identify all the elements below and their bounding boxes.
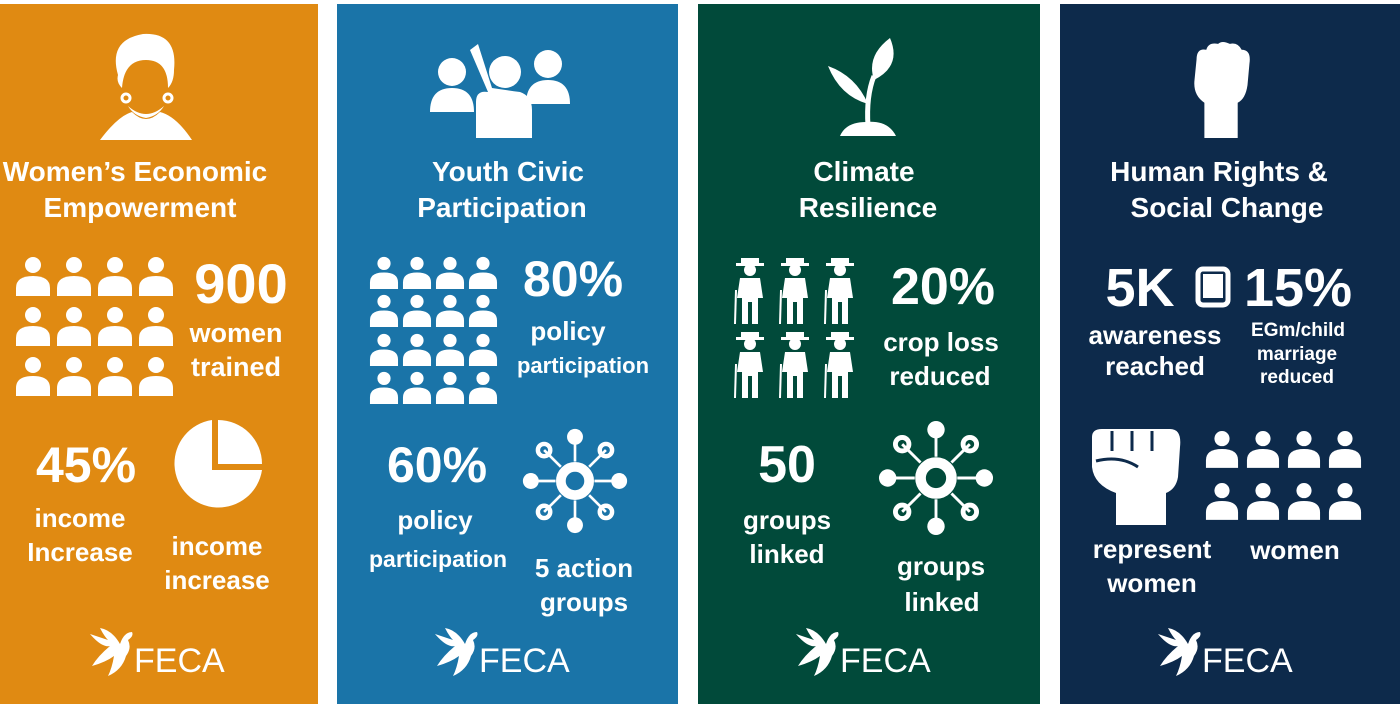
panel: youth civic participation: policy [397,505,473,535]
panel: women's economic empowerment: increase [164,565,270,595]
panel: climate resilience: groups [897,551,985,581]
stat: 80% policy participation: 80% [523,251,623,307]
panel: human rights & social change: reduced [1260,367,1334,388]
farmers grid [734,258,854,398]
panel: youth civic participation: 5 action [535,553,633,583]
panel: youth civic participation: Participation [417,192,587,223]
stat: 900 women trained: 900 [194,252,288,315]
title: Human Rights & [1110,156,1328,187]
icon: network [522,428,628,534]
panel: women's economic empowerment: trained [191,352,281,382]
icon: phone [1196,266,1230,308]
panel: women's economic empowerment: income [171,531,263,561]
icon: network [879,421,993,535]
icon: fist [1194,42,1250,138]
panel: human rights & social change: EGm/child [1251,320,1345,341]
panel: climate resilience: groups [743,505,831,535]
panel: women's economic empowerment: women [189,318,283,348]
people grid [16,257,173,396]
stat: 60% policy participation: 60% [387,437,487,493]
people grid [1206,431,1362,520]
panel: women's economic empowerment: income [34,503,126,533]
logo [796,628,931,676]
panel: youth civic participation [337,4,678,704]
panel: women's economic empowerment: Empowerment [44,192,236,223]
people grid [370,256,498,404]
panel: human rights & social change: awareness [1089,320,1221,350]
panel: climate resilience: reduced [889,361,991,391]
stat: 5K awareness reached: 5K [1105,258,1175,318]
icon: woman [100,34,192,140]
icon: plant [828,38,896,136]
stat: 20% crop loss reduced: 20% [891,258,995,316]
panel: youth civic participation: participation [369,546,507,572]
panel: women's economic empowerment [0,4,318,704]
panel: climate resilience [698,4,1040,704]
logo [435,628,570,676]
panel: climate resilience: linked [749,539,825,569]
panel: climate resilience: Resilience [799,192,937,223]
icon: group [430,44,570,138]
panel: human rights & social change: Social Change [1131,192,1323,223]
panel: human rights & social change: women [1250,535,1340,565]
panel: youth civic participation: policy [530,316,606,346]
stat: 15% marriage reduced: 15% [1244,258,1352,318]
title: Climate [813,156,915,187]
title: Women’s Economic [3,156,267,187]
stat: 45% income increase: 45% [36,437,136,493]
title: Youth Civic [432,156,584,187]
panel: climate resilience: linked [904,587,980,617]
logo [90,628,225,676]
stat: 50 groups linked: 50 [758,436,816,494]
icon: pie chart [174,420,262,508]
panel: women's economic empowerment: Increase [27,537,133,567]
panel: human rights & social change [1060,4,1400,704]
panel: youth civic participation: groups [540,587,628,617]
icon: fist large [1092,429,1180,525]
panel: human rights & social change: women [1107,568,1197,598]
panel: human rights & social change: represent [1093,534,1211,564]
logo [1158,628,1293,676]
panel: human rights & social change: marriage [1257,344,1337,365]
panel: human rights & social change: reached [1105,351,1205,381]
panel: youth civic participation: participation [517,353,649,378]
panel: climate resilience: crop loss [883,327,999,357]
